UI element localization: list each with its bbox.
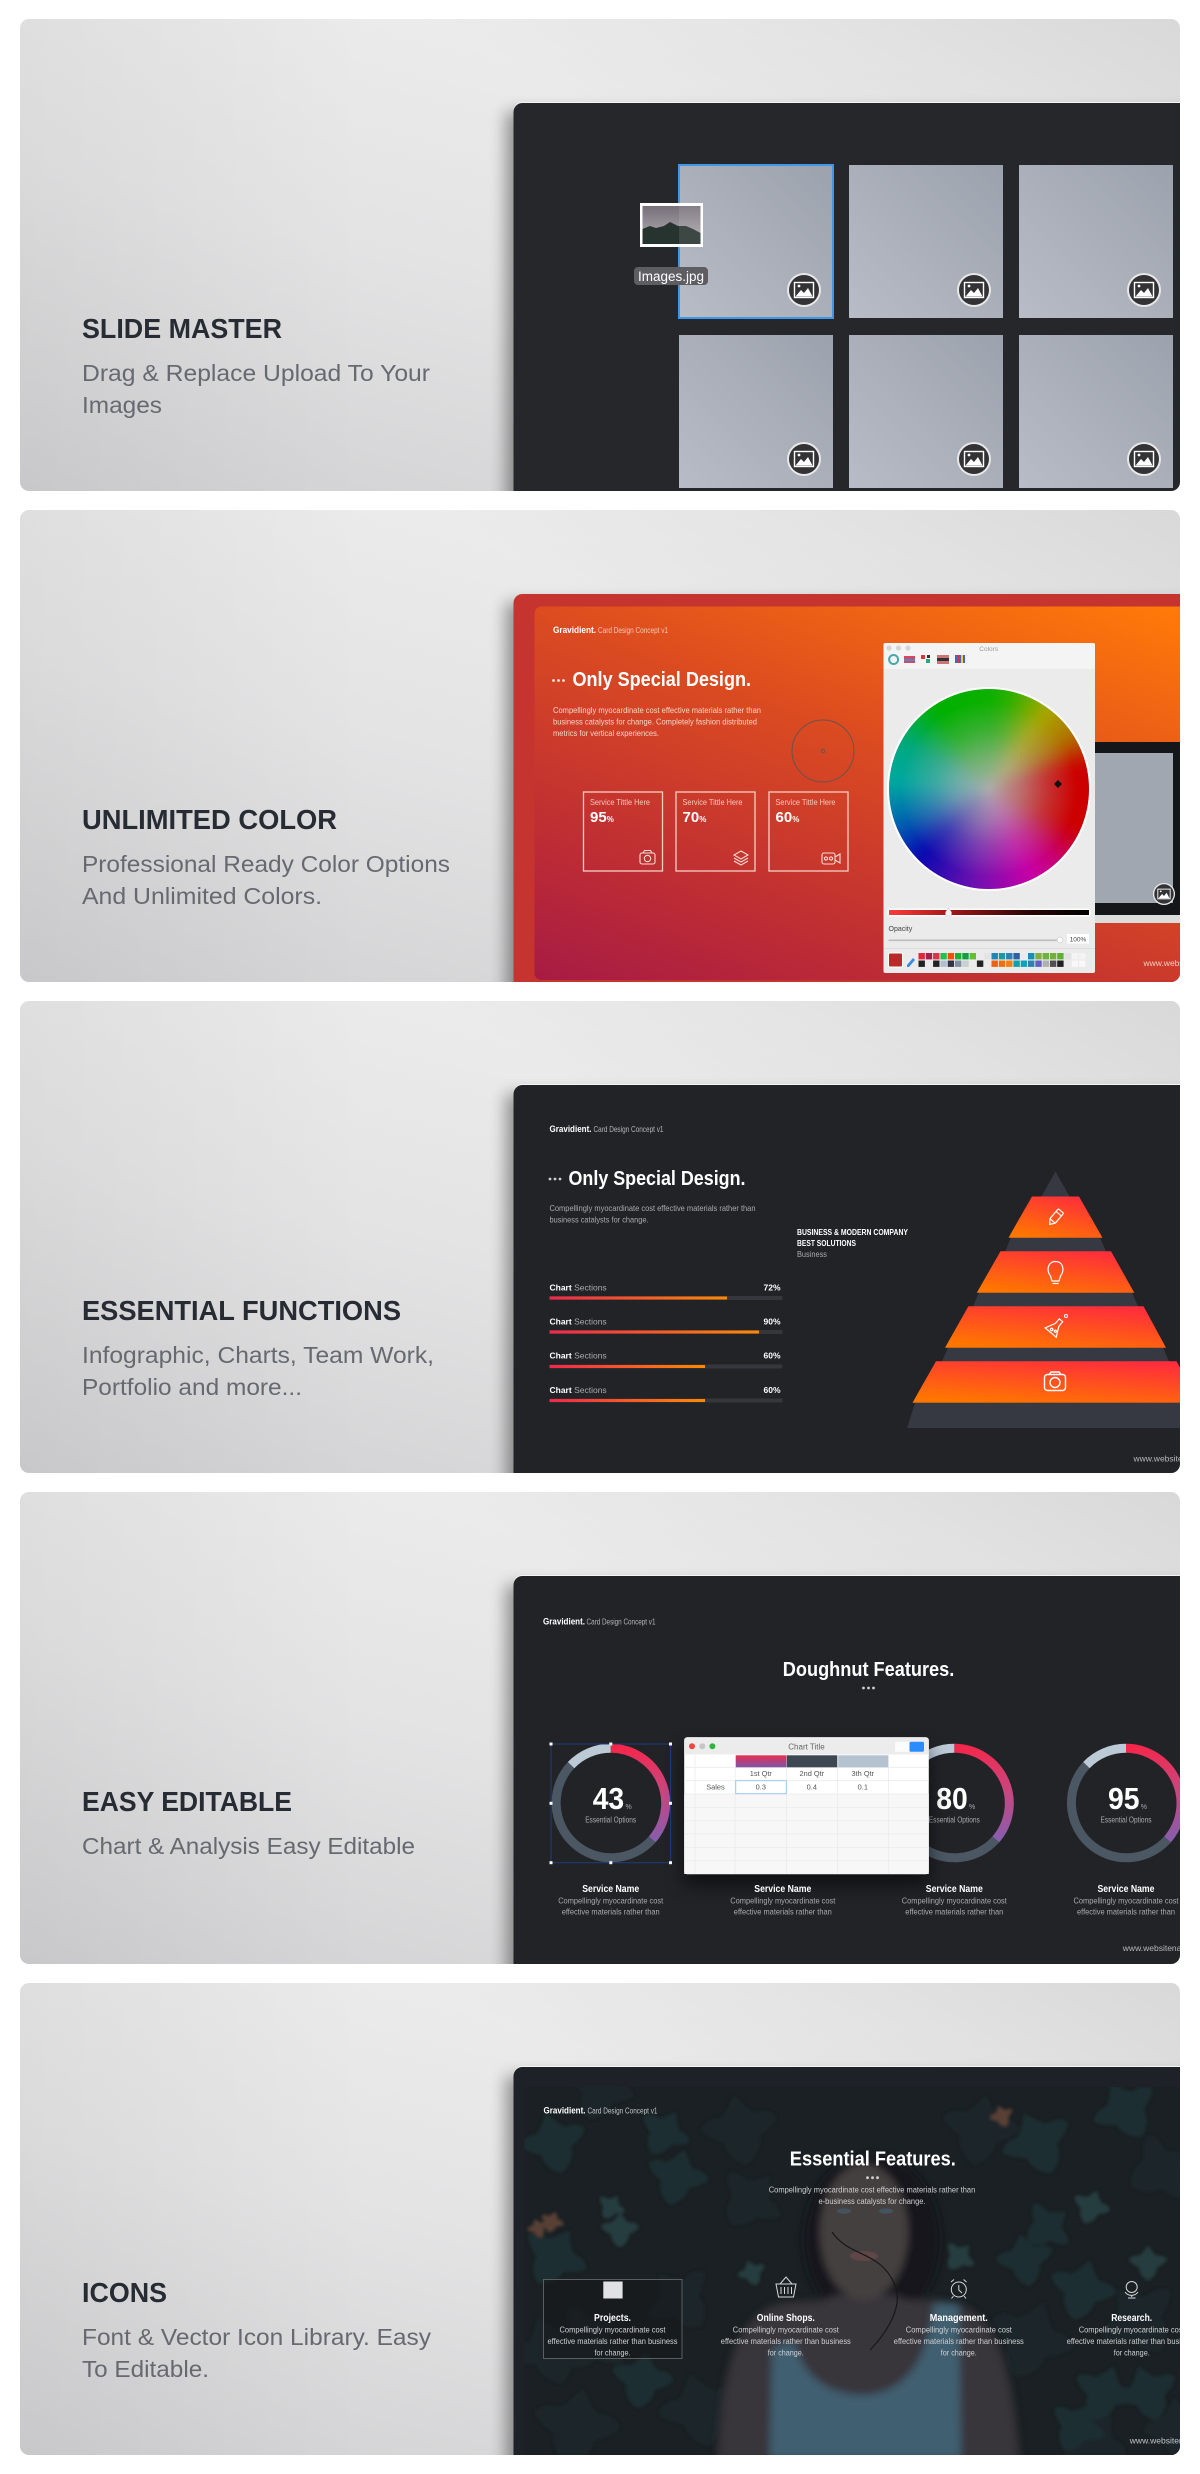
panel: unlimited color (20, 510, 1200, 1003)
icon: image placeholder (603, 2282, 623, 2298)
panel background (20, 1001, 1180, 1473)
table values: Sales (706, 1782, 725, 1792)
description: slide master: Drag & Replace Upload To Your (82, 360, 430, 386)
opacity slider (888, 926, 1089, 944)
service box 95%: Service Tittle Here (590, 797, 650, 807)
brand line (550, 1124, 664, 1135)
gradient slide (534, 606, 1200, 980)
heading: essential functions: ESSENTIAL FUNCTIONS (82, 1295, 401, 1326)
service text 4: effective materials rather than (1077, 1906, 1175, 1916)
color wheel marker (1054, 780, 1062, 788)
feature: research (1067, 2282, 1197, 2357)
service text 3: Service Name (926, 1883, 983, 1895)
table values: 3th Qtr (852, 1769, 875, 1778)
feature: management: effective materials rather than business (894, 2336, 1024, 2346)
red slide card (514, 594, 1200, 994)
tier 1 (1008, 1196, 1102, 1238)
description: essential functions: Portfolio and more... (82, 1374, 302, 1400)
description: slide master: Images (82, 392, 162, 418)
description: slide master (82, 360, 430, 418)
doughnut 80%: % (969, 1804, 975, 1811)
feature: research: Research. (1111, 2313, 1152, 2324)
doughnut 95%: Essential Options (1100, 1816, 1152, 1824)
progress bar 72% (550, 1282, 782, 1300)
company text (797, 1228, 909, 1259)
service text 1: Service Name (582, 1883, 639, 1895)
company text: BEST SOLUTIONS (797, 1239, 856, 1248)
left vignette (20, 1983, 1180, 2455)
opacity slider: Opacity (888, 926, 913, 933)
progress bar 60%: Chart Sections (550, 1385, 607, 1395)
pyramid dark layers (907, 1172, 1200, 1428)
table values (706, 1769, 875, 1792)
feature: online shops: Compellingly myocardinate cost (733, 2325, 839, 2335)
company text: BUSINESS & MODERN COMPANY (797, 1228, 909, 1237)
feature: research: Compellingly myocardinate cost (1079, 2325, 1185, 2335)
tier 4 (912, 1361, 1200, 1403)
service text 1: effective materials rather than (562, 1906, 660, 1916)
service text 1 (558, 1883, 664, 1916)
doughnut 95% (1071, 1748, 1181, 1858)
panel background (20, 1492, 1180, 1964)
brand line: Gravidient. (544, 2106, 586, 2116)
service box 95% (584, 792, 662, 871)
feature: projects: for change. (594, 2347, 630, 2357)
color wheel (887, 687, 1091, 891)
background shading (726, 19, 1180, 102)
icon: flask (1045, 1316, 1067, 1337)
progress bar 60% (550, 1350, 782, 1368)
panel background (20, 1983, 1180, 2455)
table values: 2nd Qtr (799, 1769, 825, 1778)
description: unlimited color: And Unlimited Colors. (82, 883, 322, 909)
card shadow (506, 1094, 1200, 1494)
doughnut 95%: 95 (1108, 1781, 1140, 1816)
grid lines (684, 1755, 929, 1874)
left vignette (20, 1001, 1180, 1473)
facial features (832, 2208, 897, 2350)
service box 60%: Service Tittle Here (776, 797, 836, 807)
service text 1: Compellingly myocardinate cost (558, 1896, 664, 1906)
selection circle (792, 720, 854, 782)
dark photo slide card (502, 2050, 1200, 2474)
left vignette (20, 19, 50, 446)
ivy leaves (502, 2050, 1200, 2474)
dark slide card (514, 1084, 1200, 1485)
card shadow (506, 112, 1200, 512)
slide paragraph: metrics for vertical experiences. (553, 728, 659, 738)
slide paragraph (553, 705, 761, 738)
brand line (544, 2106, 658, 2116)
progress bar 72%: Chart Sections (550, 1282, 607, 1292)
heading: icons: ICONS (82, 2277, 167, 2308)
doughnut 43%: % (626, 1804, 632, 1811)
lower grid rows (684, 1794, 929, 1874)
progress bar 60%: Chart Sections (550, 1350, 607, 1360)
woman figure (717, 2155, 1020, 2460)
slide title: Essential Features. (790, 2148, 956, 2170)
window shadow (684, 1747, 929, 1885)
service box 95%: 95% (590, 809, 614, 826)
selected cell (736, 1781, 786, 1794)
left vignette (20, 510, 50, 934)
table values: 0.4 (807, 1782, 817, 1792)
slide paragraph (769, 2184, 975, 2206)
brand line: Card Design Concept v1 (594, 1125, 664, 1134)
feature: online shops: Online Shops. (757, 2313, 815, 2324)
service text 4 (1074, 1883, 1179, 1916)
icon: video camera (822, 853, 840, 864)
table values: 0.3 (756, 1782, 766, 1792)
dark slide card (514, 102, 1200, 503)
slide paragraph: business catalysts for change. (550, 1214, 648, 1224)
background shading (20, 1983, 1180, 2455)
series header cells (736, 1755, 888, 1767)
panel: easy editable (20, 1492, 1200, 1985)
service text 2: Compellingly myocardinate cost (730, 1896, 836, 1906)
service text 2: Service Name (754, 1883, 811, 1895)
service box 60%: 60% (776, 809, 799, 826)
table values: 0.1 (858, 1782, 868, 1792)
background shading (20, 1001, 1180, 1473)
service text 4: Compellingly myocardinate cost (1074, 1896, 1179, 1906)
doughnut 80% (900, 1748, 1009, 1858)
title dots (862, 1687, 875, 1689)
swatches (884, 948, 1095, 967)
description: icons: Font & Vector Icon Library. Easy (82, 2324, 432, 2350)
heading: slide master: SLIDE MASTER (82, 313, 282, 344)
feature: management: Management. (930, 2313, 988, 2324)
image placeholder tiles (679, 165, 1173, 488)
progress bar 60%: 60% (763, 1350, 781, 1360)
dark slide card (514, 1575, 1200, 1976)
icon: basket (776, 2277, 796, 2297)
panel: slide master (20, 19, 1200, 512)
icon: camera (1044, 1372, 1066, 1390)
colors picker window (884, 643, 1095, 973)
tier 2 (977, 1251, 1134, 1293)
feature: projects: effective materials rather than business (548, 2336, 678, 2346)
service box 70% (676, 792, 755, 871)
slide paragraph: e-business catalysts for change. (818, 2196, 926, 2206)
service text 3: Compellingly myocardinate cost (902, 1896, 1007, 1906)
doughnut 43%: Essential Options (585, 1816, 636, 1824)
icon: globe stand (1125, 2282, 1138, 2298)
window title bar (684, 1737, 929, 1754)
heading: easy editable: EASY EDITABLE (82, 1786, 292, 1817)
brightness slider (888, 908, 1090, 916)
doughnut 43%: 43 (593, 1781, 624, 1816)
icon: pencil (1047, 1209, 1064, 1227)
dragged thumbnail image (640, 203, 703, 247)
window toolbar: Colors (979, 646, 999, 653)
feature: management: for change. (941, 2347, 977, 2357)
doughnut 80%: Essential Options (929, 1816, 980, 1824)
icon: bubble (1064, 1314, 1068, 1318)
service box 60% (769, 792, 848, 871)
brand line: Gravidient. (543, 1616, 585, 1628)
brand line: Gravidient. (553, 625, 596, 636)
slide paragraph: Compellingly myocardinate cost effective materials rather than (550, 1203, 756, 1213)
service text 3: effective materials rather than (905, 1906, 1003, 1916)
panel: icons (20, 1983, 1200, 2474)
placeholder image icons (787, 273, 1161, 476)
laptop mockup (1095, 742, 1180, 923)
card shadow (506, 2076, 1200, 2474)
title dots (866, 2176, 879, 2179)
progress bar 60%: 60% (763, 1385, 781, 1395)
tier 3 (945, 1306, 1166, 1348)
left vignette (20, 1492, 1180, 1964)
background photo: woman lying in ivy (502, 2050, 1200, 2474)
icon: camera (640, 850, 655, 864)
service text 4: Service Name (1098, 1883, 1155, 1895)
icon: light bulb (1048, 1262, 1063, 1284)
description: essential functions (82, 1342, 434, 1400)
table values: 1st Qtr (750, 1769, 772, 1778)
slide paragraph (550, 1203, 756, 1224)
icon: alarm clock (951, 2280, 966, 2298)
description: essential functions: Infographic, Charts, Team Work, (82, 1342, 434, 1368)
pyramid chart (907, 1172, 1200, 1428)
opacity slider: 100% (1070, 936, 1087, 944)
progress bar 90% (550, 1316, 782, 1334)
panel background (20, 19, 1180, 491)
window title bar: Chart Title (788, 1742, 825, 1752)
brand line: Gravidient. (550, 1124, 592, 1135)
progress bar 72%: 72% (763, 1282, 781, 1292)
card shadow (506, 603, 1200, 1003)
icon: layers (734, 851, 748, 865)
feature: projects: Compellingly myocardinate cost (560, 2325, 666, 2335)
panel background (20, 510, 1180, 982)
background shading (20, 1492, 1180, 1964)
progress bar 90%: Chart Sections (550, 1316, 607, 1326)
brand line: Card Design Concept v1 (588, 2106, 658, 2116)
brand line: Card Design Concept v1 (586, 1618, 656, 1626)
feature: online shops (721, 2277, 851, 2357)
service text 3 (902, 1883, 1007, 1916)
description: easy editable: Chart & Analysis Easy Editable (82, 1833, 415, 1859)
description: unlimited color (82, 855, 450, 904)
service box 70%: 70% (682, 809, 706, 826)
feature: projects: Projects. (594, 2313, 631, 2324)
description: icons: To Editable. (82, 2356, 209, 2382)
selection frame with handles (550, 1742, 672, 1864)
company text: Business (797, 1250, 827, 1259)
service text 2: effective materials rather than (734, 1906, 832, 1916)
file name label: Images.jpg (638, 269, 704, 284)
brand line (553, 626, 668, 634)
card shadow (506, 1585, 1200, 1985)
slide paragraph: Compellingly myocardinate cost effective materials rather than (769, 2184, 975, 2194)
background shading (726, 510, 1180, 594)
feature: management (894, 2280, 1024, 2357)
chart data window (684, 1737, 929, 1874)
feature: online shops: effective materials rather than business (721, 2336, 851, 2346)
slide paragraph: Compellingly myocardinate cost effective materials rather than (553, 705, 761, 715)
feature: projects (544, 2280, 682, 2358)
feature: research: for change. (1114, 2347, 1150, 2357)
slide paragraph: business catalysts for change. Completely fashion distributed (553, 716, 757, 726)
heading: unlimited color: UNLIMITED COLOR (82, 804, 337, 835)
brand line: Card Design Concept v1 (598, 626, 668, 635)
description: unlimited color: Professional Ready Color Options (82, 851, 450, 877)
doughnut 95%: % (1141, 1804, 1147, 1811)
doughnut 80%: 80 (936, 1781, 968, 1816)
progress bar 60% (550, 1385, 782, 1402)
slide title: Only Special Design. (568, 1168, 746, 1190)
feature: management: Compellingly myocardinate cost (906, 2325, 1012, 2335)
service box 70%: Service Tittle Here (682, 797, 743, 807)
brand line (543, 1616, 656, 1628)
panel: essential functions (20, 1001, 1200, 1494)
slide title: Only Special Design. (572, 669, 751, 691)
doughnut 43% (556, 1748, 666, 1858)
progress bar 90%: 90% (763, 1316, 781, 1326)
service text 2 (730, 1883, 836, 1916)
window toolbar (884, 643, 1095, 669)
description: icons (82, 2324, 432, 2382)
feature: online shops: for change. (768, 2347, 804, 2357)
slide title: Doughnut Features. (783, 1659, 954, 1681)
